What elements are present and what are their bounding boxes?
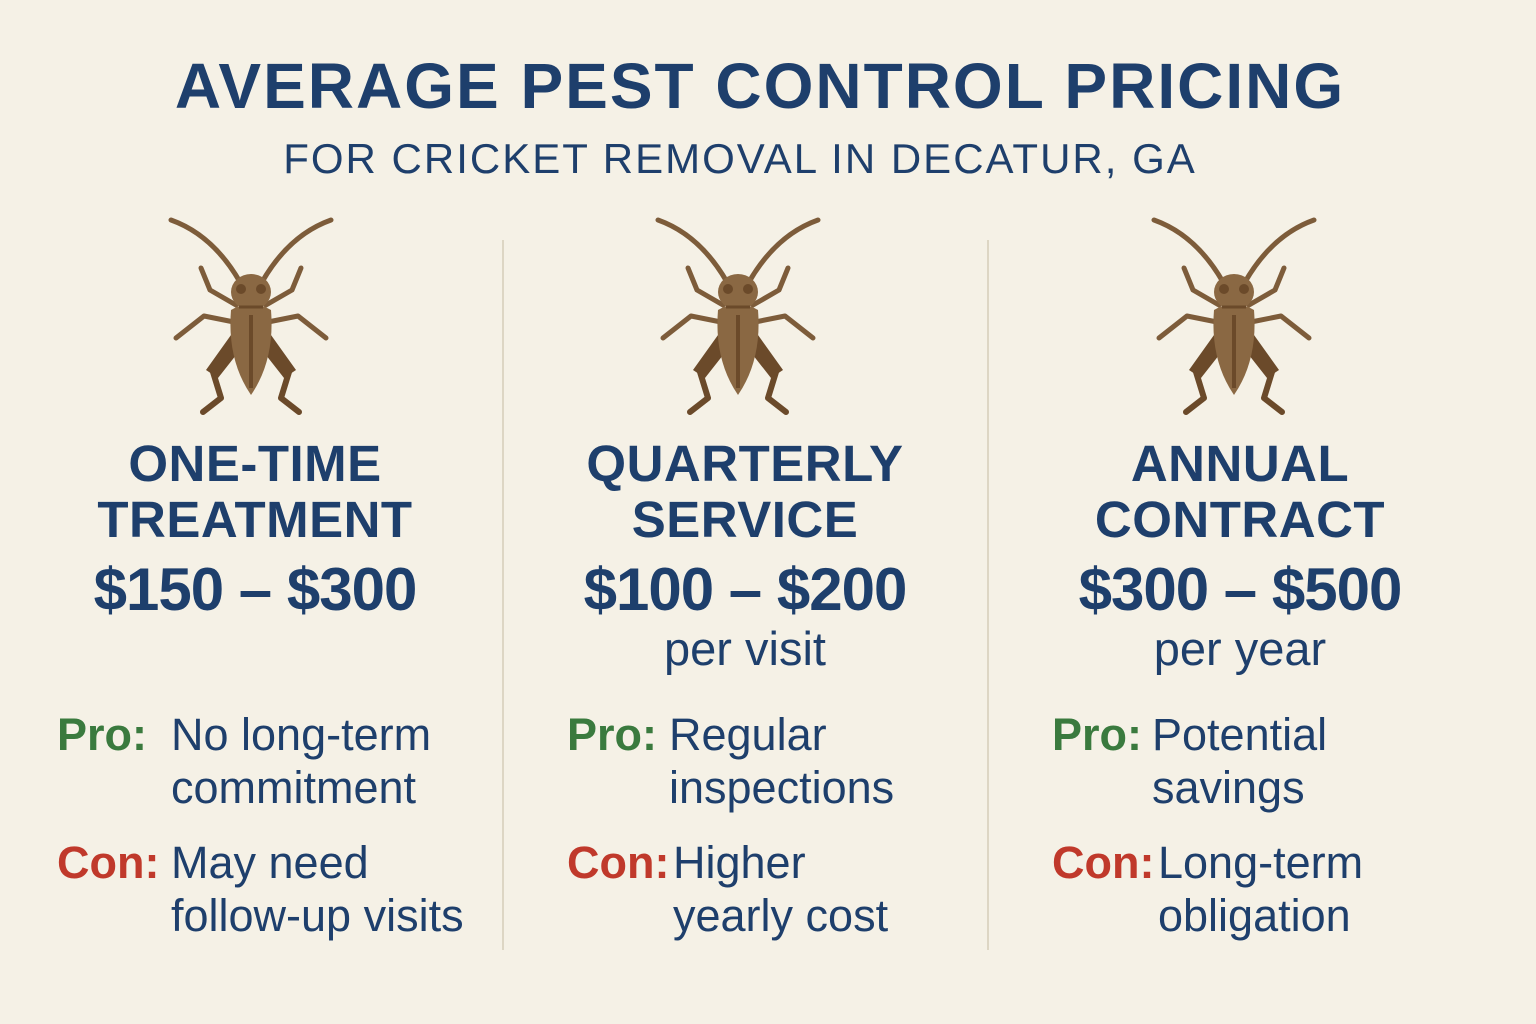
heading: SERVICE (632, 491, 858, 548)
price: $150 – $300 (94, 556, 416, 623)
pro: No long-term (171, 709, 431, 760)
title: AVERAGE PEST CONTROL PRICING (175, 50, 1345, 122)
icon: cricket (168, 218, 334, 415)
panel: quarterly (567, 218, 906, 941)
con (567, 837, 888, 941)
price: $100 – $200 (584, 556, 906, 623)
con: Con: (57, 837, 159, 888)
icon: cricket (656, 218, 820, 415)
con: follow-up visits (171, 890, 464, 941)
pro (1052, 709, 1327, 813)
pro: inspections (669, 762, 894, 813)
unit: per year (1154, 622, 1326, 675)
heading: ONE-TIME (128, 435, 382, 492)
pro: Pro: (1052, 709, 1142, 760)
unit: per visit (664, 622, 826, 675)
icon: cricket (1152, 218, 1316, 415)
heading (586, 435, 904, 548)
heading: QUARTERLY (586, 435, 904, 492)
pro (57, 709, 431, 813)
heading: CONTRACT (1095, 491, 1385, 548)
pro (567, 709, 894, 813)
pro: commitment (171, 762, 416, 813)
con (57, 837, 464, 941)
con: Con: (1052, 837, 1154, 888)
pro: Regular (669, 709, 827, 760)
heading (1095, 435, 1385, 548)
subtitle: FOR CRICKET REMOVAL IN DECATUR, GA (283, 135, 1197, 182)
con: Higher (673, 837, 806, 888)
con: Long-term (1158, 837, 1363, 888)
con: May need (171, 837, 369, 888)
pro: savings (1152, 762, 1305, 813)
pro: Pro: (567, 709, 657, 760)
price: $300 – $500 (1079, 556, 1401, 623)
heading: TREATMENT (97, 491, 413, 548)
con: Con: (567, 837, 669, 888)
panel: one-time (57, 218, 464, 941)
con: obligation (1158, 890, 1351, 941)
con (1052, 837, 1363, 941)
heading (97, 435, 413, 548)
panel: annual (1052, 218, 1401, 941)
heading: ANNUAL (1131, 435, 1349, 492)
pro: Potential (1152, 709, 1327, 760)
con: yearly cost (673, 890, 888, 941)
pro: Pro: (57, 709, 147, 760)
